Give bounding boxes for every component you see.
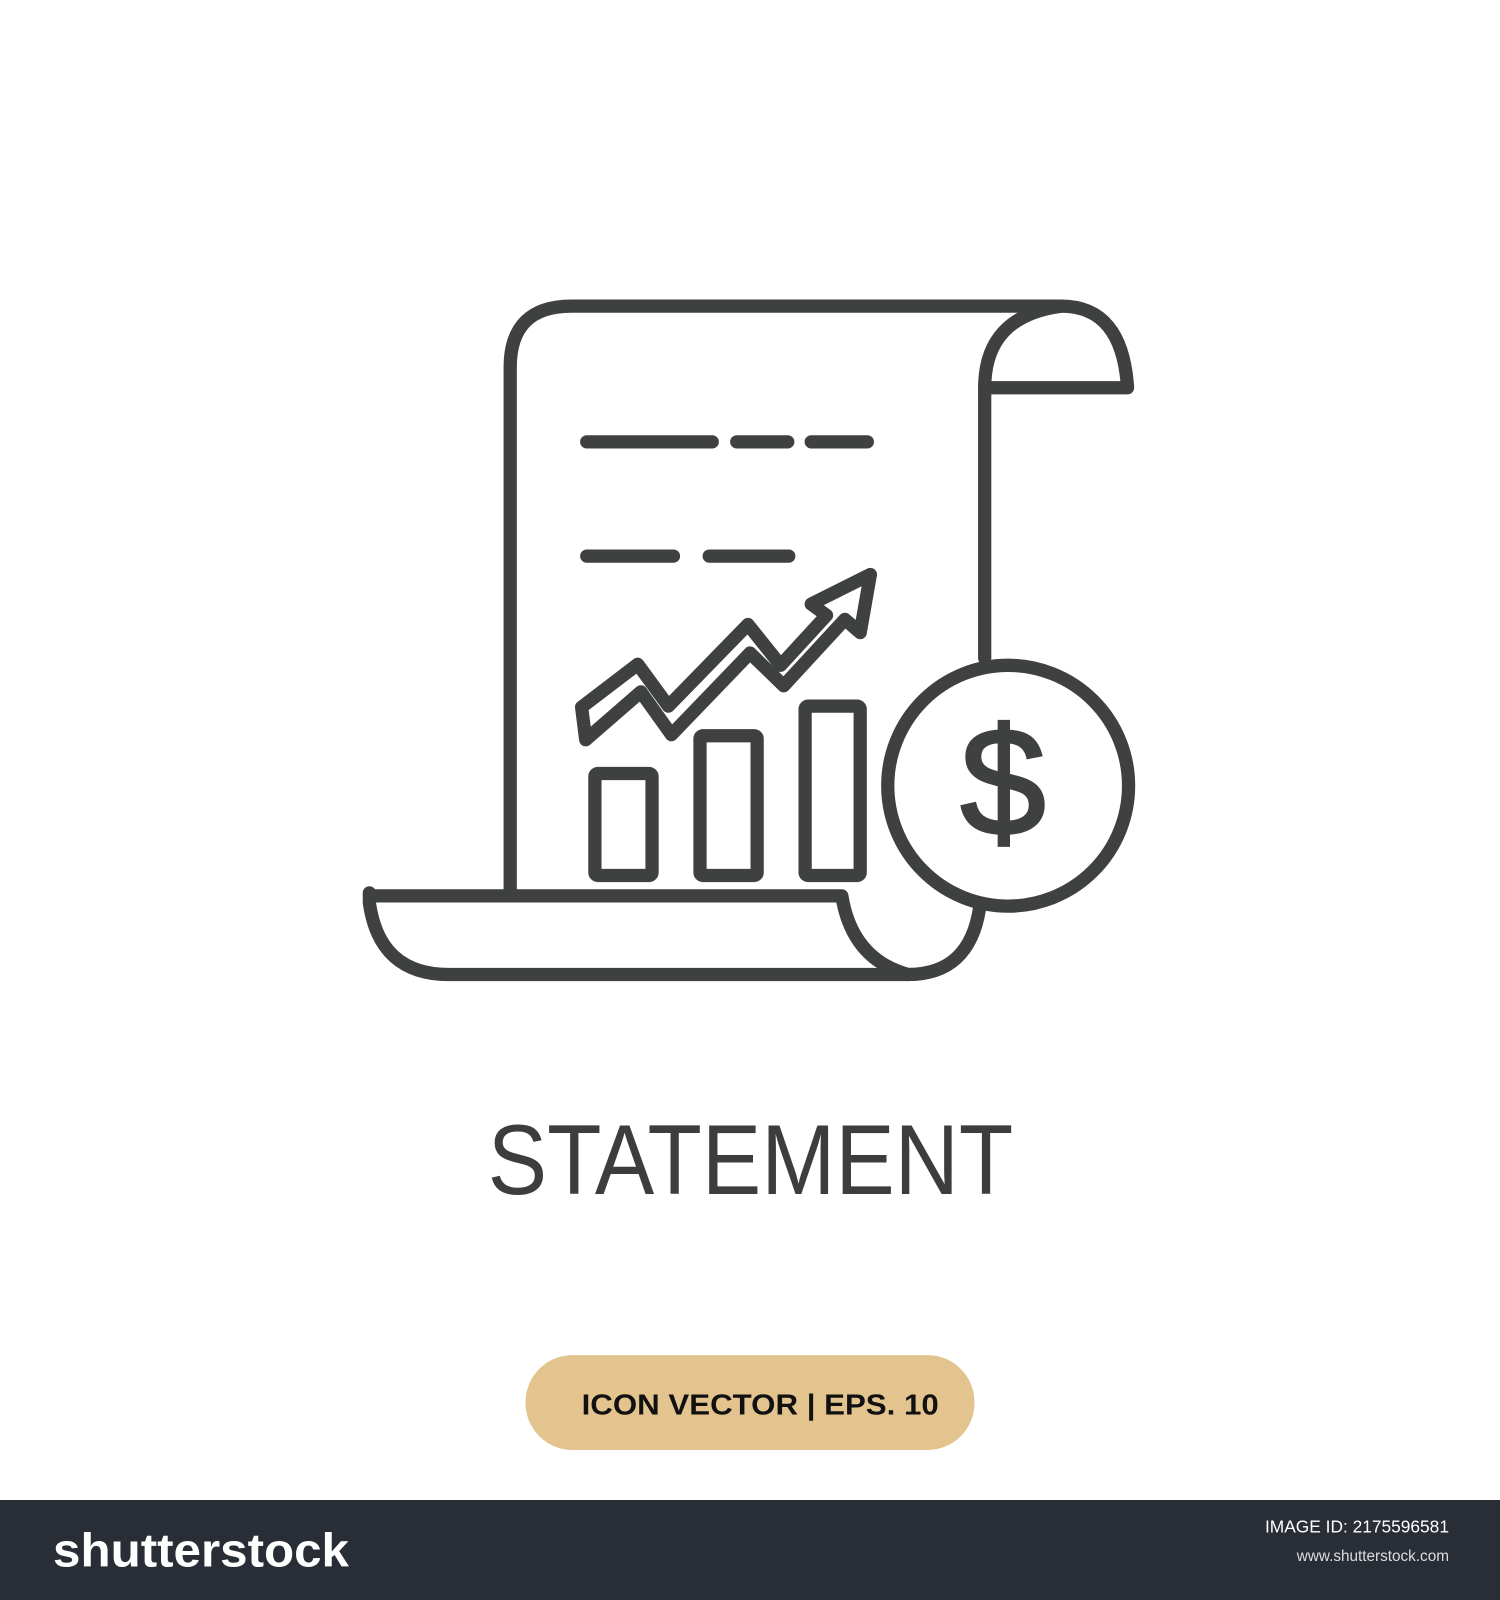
arrow up trend: [582, 574, 870, 740]
coin with dollar: [888, 665, 1129, 906]
badge: icon vector eps 10: [526, 1355, 974, 1450]
footer logo: shutterstock: [53, 1524, 350, 1576]
text lines: [587, 442, 867, 556]
icon: financial statement scroll: [369, 306, 1129, 974]
scroll paper: [369, 306, 1128, 974]
bar chart: [595, 706, 860, 876]
image id: IMAGE ID: 2175596581: [1265, 1517, 1449, 1537]
badge: icon vector eps 10: ICON VECTOR | EPS. 10: [582, 1389, 939, 1421]
title: STATEMENT: STATEMENT: [488, 1104, 1013, 1215]
url: www.shutterstock.com: [1296, 1548, 1449, 1565]
footer bar: [0, 1500, 1500, 1600]
dollar sign: $: [960, 697, 1046, 868]
